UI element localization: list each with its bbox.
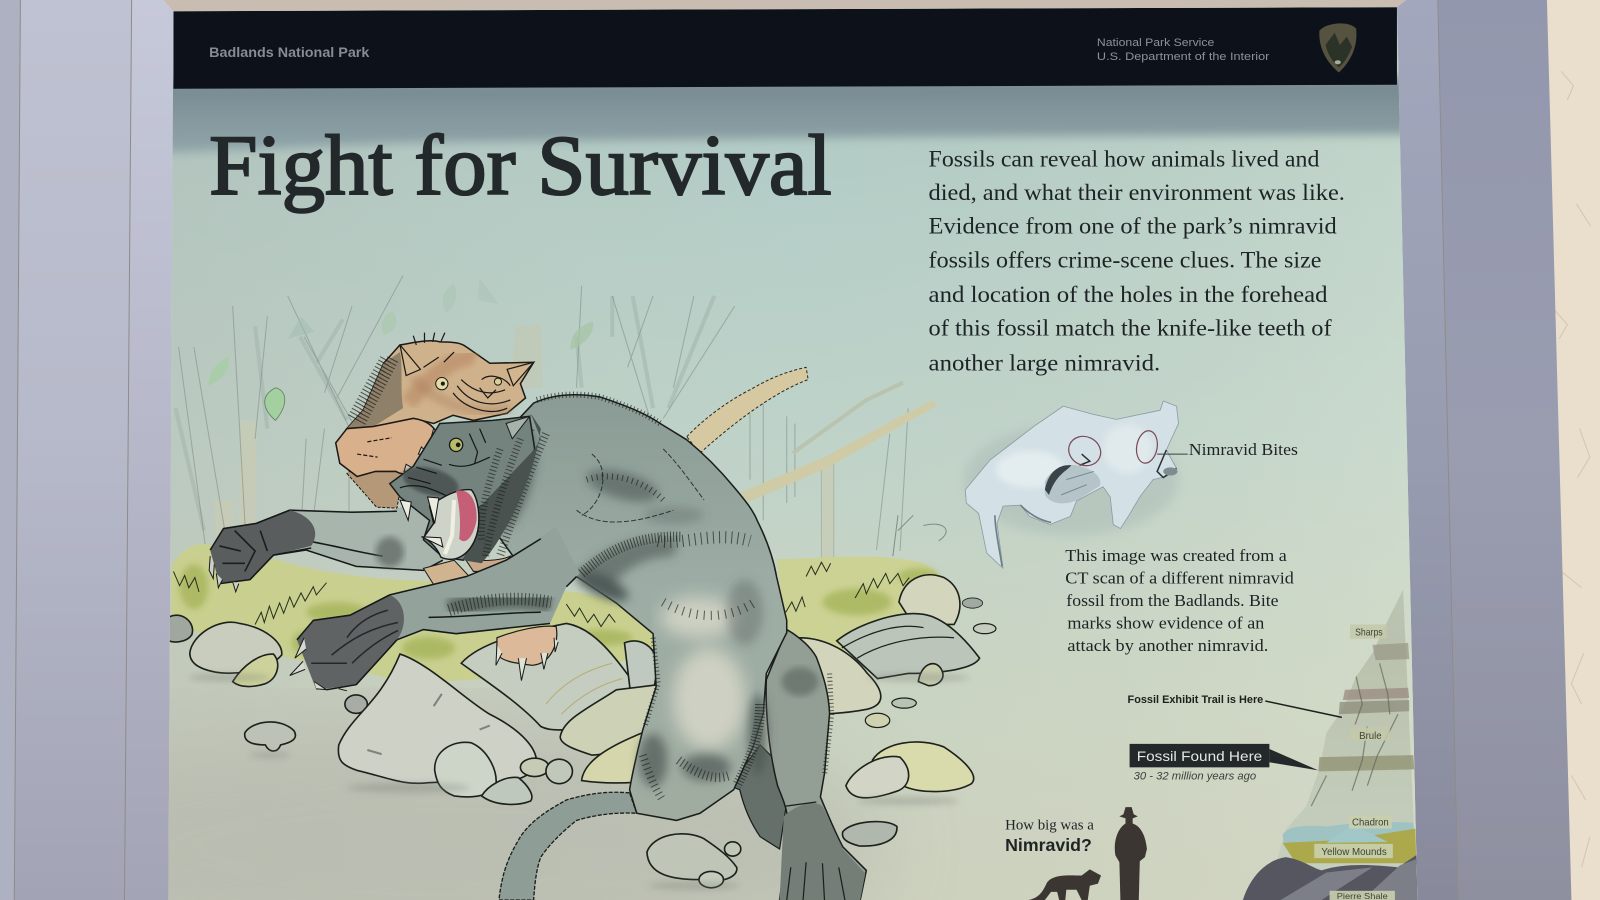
CT scan caption: marks show evidence of an	[1067, 614, 1265, 633]
illustration: rock shadows	[189, 673, 969, 890]
CT scan caption: CT scan of a different nimravid	[1065, 569, 1294, 588]
upper foreleg	[211, 507, 444, 572]
head	[390, 416, 535, 560]
stratum label: Yellow Mounds: Yellow Mounds	[1321, 847, 1387, 858]
left inner frame	[124, 0, 173, 900]
callout: fossil found here: Fossil Found Here	[1137, 749, 1262, 765]
intro paragraph: fossils offers crime-scene clues. The size	[929, 247, 1321, 272]
CT scan caption	[1065, 546, 1294, 655]
stratum label: Sharps: Sharps	[1355, 628, 1383, 639]
intro paragraph: of this fossil match the knife-like teeth of	[929, 316, 1332, 341]
stratum label: Brule: Brule	[1359, 731, 1382, 742]
tan column	[423, 560, 469, 585]
fangs	[400, 497, 443, 547]
CT scan caption: attack by another nimravid.	[1067, 636, 1268, 655]
illustration: leaves	[208, 278, 593, 420]
fur shading	[486, 426, 767, 787]
stratum label: Yellow Mounds	[1314, 844, 1393, 858]
size comparison heading: How big was a	[1005, 818, 1094, 834]
icon: nimravid silhouette	[1029, 869, 1101, 900]
illustration: grass	[171, 544, 954, 684]
stratum label: Chadron: Chadron	[1352, 818, 1389, 829]
back hind leg	[735, 744, 786, 850]
wall	[1531, 0, 1600, 900]
top frame strip	[163, 0, 1406, 11]
far hind leg	[766, 630, 866, 900]
body	[480, 395, 787, 820]
CT scan caption: This image was created from a	[1065, 546, 1287, 565]
intro paragraph: Evidence from one of the park’s nimravid	[929, 214, 1337, 239]
top shadow on sign	[163, 78, 1413, 153]
illustration: beige tail and branch	[687, 367, 937, 502]
illustration: tan nimravid	[336, 333, 534, 508]
left wall strip	[0, 0, 20, 900]
right inner frame	[1397, 0, 1458, 900]
icon: NPS arrowhead	[1319, 23, 1356, 72]
sign panel	[168, 7, 1418, 900]
intro paragraph: Fossils can reveal how animals lived and	[929, 146, 1320, 171]
agency text: U.S. Department of the Interior	[1097, 51, 1270, 63]
intro paragraph: and location of the holes in the forehead	[929, 282, 1328, 307]
stratum label: Sharps	[1350, 624, 1387, 639]
open mouth	[423, 490, 479, 559]
stratum label: Brule	[1350, 728, 1390, 742]
nimravid bites leader line	[1157, 454, 1188, 455]
tan foreleg	[336, 418, 437, 477]
size comparison heading	[1005, 818, 1094, 855]
icon: ranger silhouette	[1115, 807, 1147, 900]
tan paw on rock	[497, 626, 557, 665]
rock strata mountain diagram	[1243, 590, 1417, 900]
tail	[499, 792, 637, 900]
callout: fossil exhibit trail	[1128, 694, 1342, 717]
header band	[173, 7, 1397, 89]
left outer frame	[14, 0, 132, 900]
skull illustration	[964, 401, 1179, 568]
lower paw	[297, 595, 404, 690]
illustration: gray nimravid	[209, 395, 866, 900]
lower foreleg	[297, 556, 580, 690]
callout: fossil exhibit trail: Fossil Exhibit Trail is Here	[1128, 694, 1263, 706]
intro paragraph: died, and what their environment was like.	[929, 180, 1345, 205]
callout: fossil found here	[1130, 744, 1318, 770]
label: nimravid bites: Nimravid Bites	[1189, 440, 1298, 459]
agency text: National Park Service	[1097, 37, 1214, 49]
illustration: background trees	[176, 276, 946, 633]
belly highlight	[660, 597, 746, 750]
park name: Badlands National Park	[209, 45, 369, 61]
intro paragraph: another large nimravid.	[929, 350, 1160, 375]
illustration: rocks	[168, 575, 996, 888]
fur strokes	[490, 395, 760, 801]
intro paragraph	[929, 146, 1345, 375]
CT scan caption: fossil from the Badlands. Bite	[1066, 591, 1279, 610]
title: Fight for Survival	[209, 118, 832, 213]
agency text	[1097, 37, 1270, 63]
right outer frame	[1438, 0, 1571, 900]
upper paw	[210, 510, 315, 584]
fossil age: 30 - 32 million years ago	[1134, 771, 1256, 783]
size comparison heading: Nimravid?	[1005, 835, 1092, 855]
